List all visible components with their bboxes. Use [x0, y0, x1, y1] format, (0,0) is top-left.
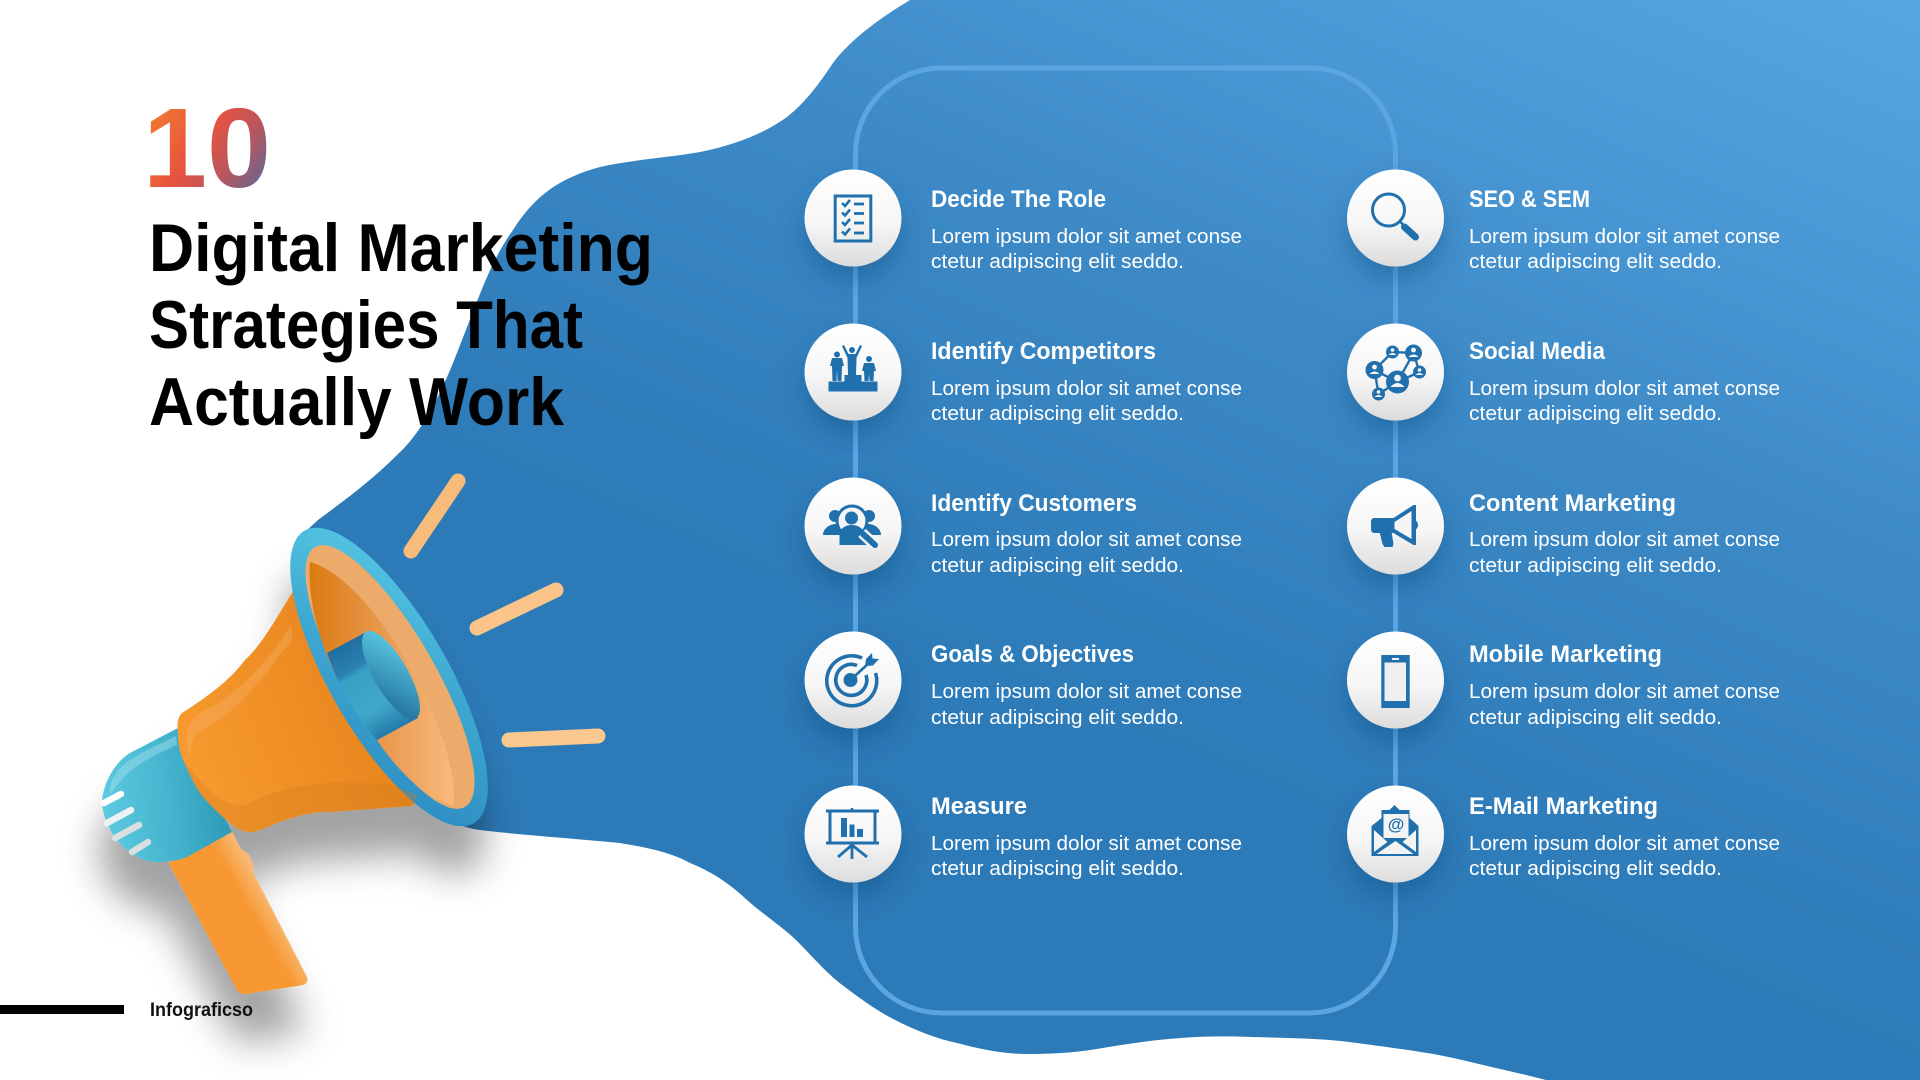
- icon: magnifier: [1372, 194, 1416, 237]
- text: Goals & Objectives: ctetur adipiscing elit seddo.: [931, 707, 1184, 729]
- text: SEO & SEM: ctetur adipiscing elit seddo.: [1469, 251, 1722, 273]
- megaphone inner tube: [327, 631, 418, 740]
- text: Social Media: ctetur adipiscing elit seddo.: [1469, 403, 1722, 425]
- text: E-Mail Marketing: ctetur adipiscing elit seddo.: [1469, 858, 1722, 880]
- text: Goals & Objectives: [931, 641, 1242, 729]
- text: Identify Competitors: ctetur adipiscing elit seddo.: [931, 403, 1184, 425]
- text: Content Marketing: Content Marketing: [1469, 490, 1676, 517]
- title: [149, 210, 653, 440]
- number 10: 10: [143, 85, 271, 211]
- item: Content Marketing: [1347, 478, 1444, 574]
- text: Goals & Objectives: Lorem ipsum dolor sit amet conse: [931, 681, 1242, 703]
- cap highlight: [110, 736, 177, 795]
- text: Mobile Marketing: [1469, 641, 1780, 729]
- icon: smartphone: [1381, 655, 1410, 708]
- item: Measure: [804, 786, 902, 882]
- text: Identify Customers: [931, 490, 1242, 577]
- rounded timeline frame: [856, 68, 1396, 1013]
- icon: checklist: [835, 196, 871, 241]
- icon: email envelope: @: [1388, 815, 1404, 834]
- text: Decide The Role: [931, 186, 1242, 273]
- text: Social Media: Social Media: [1469, 338, 1606, 365]
- text: Decide The Role: Decide The Role: [931, 186, 1106, 213]
- megaphone inner cone: [309, 562, 454, 805]
- text: Decide The Role: Lorem ipsum dolor sit amet conse: [931, 226, 1242, 248]
- body highlight: [186, 625, 292, 757]
- text: Decide The Role: ctetur adipiscing elit seddo.: [931, 251, 1184, 273]
- item: SEO & SEM: [1347, 170, 1444, 266]
- text: SEO & SEM: [1469, 186, 1780, 273]
- text: Mobile Marketing: Mobile Marketing: [1469, 641, 1662, 668]
- title: Digital Marketing: [149, 210, 653, 286]
- text: Content Marketing: ctetur adipiscing elit seddo.: [1469, 555, 1722, 577]
- text: E-Mail Marketing: Lorem ipsum dolor sit amet conse: [1469, 833, 1780, 855]
- text: Mobile Marketing: ctetur adipiscing elit seddo.: [1469, 707, 1722, 729]
- text: Identify Customers: ctetur adipiscing elit seddo.: [931, 555, 1184, 577]
- icon: presentation board: [826, 808, 879, 859]
- text: Social Media: [1469, 338, 1780, 425]
- icon: network: [1366, 344, 1426, 400]
- item: Identify Customers: [804, 478, 902, 574]
- brand label: Infograficso: [150, 1000, 253, 1021]
- item: E-Mail Marketing: [1347, 786, 1444, 882]
- text: Identify Competitors: Lorem ipsum dolor sit amet conse: [931, 378, 1242, 400]
- text: SEO & SEM: SEO & SEM: [1469, 186, 1590, 213]
- cap stripes: [104, 794, 148, 852]
- body lower shade: [183, 760, 418, 832]
- item: Social Media: [1347, 324, 1444, 420]
- text: Identify Competitors: Identify Competitors: [931, 338, 1156, 365]
- text: SEO & SEM: Lorem ipsum dolor sit amet conse: [1469, 226, 1780, 248]
- left baseline bar: [0, 1005, 124, 1014]
- sound ticks: [411, 481, 598, 740]
- title: Strategies That: [149, 287, 583, 363]
- text: Identify Customers: Identify Customers: [931, 490, 1137, 517]
- icon: megaphone: [1371, 505, 1418, 547]
- text: Measure: ctetur adipiscing elit seddo.: [931, 858, 1184, 880]
- item: Mobile Marketing: [1347, 632, 1444, 728]
- text: Identify Competitors: [931, 338, 1242, 425]
- text: Social Media: Lorem ipsum dolor sit amet conse: [1469, 378, 1780, 400]
- text: Measure: [931, 793, 1242, 880]
- text: Mobile Marketing: Lorem ipsum dolor sit amet conse: [1469, 681, 1780, 703]
- text: E-Mail Marketing: [1469, 793, 1780, 880]
- text: Measure: Measure: [931, 793, 1027, 820]
- item: Decide The Role: [804, 170, 902, 266]
- text: Content Marketing: Lorem ipsum dolor sit amet conse: [1469, 529, 1780, 551]
- item: Goals & Objectives: [804, 632, 902, 728]
- icon: customers magnifier: [823, 506, 881, 546]
- item: Identify Competitors: [804, 324, 902, 420]
- text: Measure: Lorem ipsum dolor sit amet conse: [931, 833, 1242, 855]
- text: Identify Customers: Lorem ipsum dolor sit amet conse: [931, 529, 1242, 551]
- megaphone illustration: [102, 481, 598, 994]
- text: E-Mail Marketing: E-Mail Marketing: [1469, 793, 1658, 820]
- megaphone inner ring: [276, 525, 504, 829]
- title: Actually Work: [149, 364, 564, 440]
- text: Goals & Objectives: Goals & Objectives: [931, 641, 1134, 668]
- icon: podium: [828, 345, 878, 392]
- icon: target: [827, 653, 879, 706]
- text: Content Marketing: [1469, 490, 1780, 577]
